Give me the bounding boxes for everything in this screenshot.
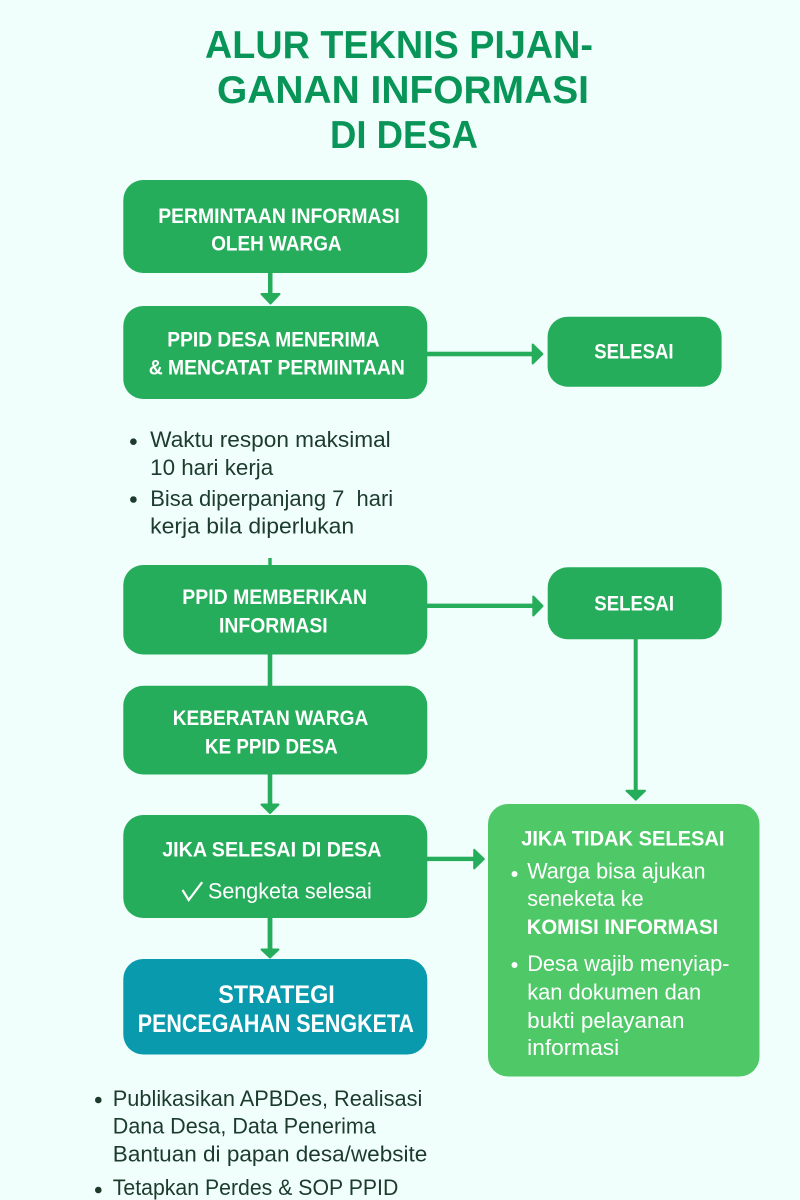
text: sengketa selesai: Sengketa selesai bbox=[208, 878, 372, 904]
box: permintaan informasi: OLEH WARGA bbox=[211, 232, 342, 256]
box: strategi pencegahan sengketa bbox=[123, 959, 427, 1054]
heading: jika tidak selesai: JIKA TIDAK SELESAI bbox=[521, 826, 724, 850]
box: selesai 2 bbox=[548, 567, 722, 639]
box: ppid memberikan informasi: INFORMASI bbox=[219, 614, 328, 638]
box: jika selesai di desa bbox=[123, 815, 427, 918]
box: ppid memberikan informasi bbox=[123, 565, 427, 654]
box: ppid memberikan informasi: PPID MEMBERIKAN bbox=[182, 585, 367, 609]
text block: dokumen: informasi bbox=[527, 1035, 619, 1060]
text block: strategi list: Dana Desa, Data Penerima bbox=[113, 1114, 377, 1138]
box: keberatan warga: KE PPID DESA bbox=[205, 734, 338, 758]
text block: strategi list: Bantuan di papan desa/website bbox=[113, 1142, 427, 1166]
box: ppid desa menerima: PPID DESA MENERIMA bbox=[167, 328, 380, 352]
arrow: ppid to selesai 1 bbox=[426, 344, 542, 364]
connector stub above ppid memberikan bbox=[268, 558, 272, 567]
text block: dokumen: kan dokumen dan bbox=[527, 980, 701, 1004]
box: ppid desa menerima: & MENCATAT PERMINTAAN bbox=[149, 356, 405, 380]
box: keberatan warga bbox=[123, 686, 427, 774]
text block: waktu respon bbox=[130, 427, 393, 538]
box: selesai 1 bbox=[548, 317, 722, 387]
text block: waktu respon: kerja bila diperlukan bbox=[150, 514, 354, 538]
title: GANAN INFORMASI bbox=[217, 69, 589, 112]
text block: dokumen: bukti pelayanan bbox=[527, 1008, 684, 1033]
text block: strategi list: Tetapkan Perdes & SOP PPID bbox=[113, 1175, 398, 1200]
box: permintaan informasi bbox=[123, 180, 427, 273]
arrow: keberatan to jika selesai bbox=[262, 773, 278, 813]
arrow: jika selesai to strategi bbox=[262, 917, 278, 958]
arrow: selesai 2 to jika tidak selesai bbox=[626, 638, 645, 800]
title: ALUR TEKNIS PIJAN- bbox=[205, 24, 593, 67]
text block: ajukan sengketa: Warga bisa ajukan bbox=[527, 858, 706, 884]
box: strategi pencegahan sengketa: PENCEGAHAN SENGKETA bbox=[138, 1010, 414, 1038]
text block: waktu respon: Bisa diperpanjang 7 hari bbox=[150, 486, 393, 511]
panel: jika tidak selesai bbox=[488, 804, 760, 1076]
arrow: jika selesai to jika tidak selesai bbox=[426, 850, 484, 868]
text block: dokumen: Desa wajib menyiap- bbox=[527, 951, 730, 976]
box: permintaan informasi: PERMINTAAN INFORMASI bbox=[158, 204, 400, 228]
title: DI DESA bbox=[330, 114, 478, 157]
connector: memberikan to keberatan bbox=[268, 653, 272, 687]
box: selesai 2: SELESAI bbox=[594, 592, 674, 616]
title bbox=[205, 24, 593, 157]
box: ppid desa menerima bbox=[123, 306, 427, 399]
box: strategi pencegahan sengketa: STRATEGI bbox=[218, 981, 335, 1009]
text block: dokumen bbox=[512, 951, 730, 1060]
text block: strategi list bbox=[95, 1086, 427, 1200]
text block: waktu respon: 10 hari kerja bbox=[150, 455, 274, 480]
text block: strategi list: Publikasikan APBDes, Realisasi bbox=[113, 1086, 422, 1111]
text block: ajukan sengketa bbox=[512, 858, 718, 939]
box: jika selesai di desa: JIKA SELESAI DI DESA bbox=[162, 837, 382, 861]
icon: check mark bbox=[182, 882, 202, 900]
text block: waktu respon: Waktu respon maksimal bbox=[150, 427, 391, 452]
arrow: permintaan to ppid bbox=[262, 272, 280, 304]
text block: ajukan sengketa: seneketa ke bbox=[527, 886, 644, 911]
text block: ajukan sengketa: KOMISI INFORMASI bbox=[527, 915, 718, 939]
arrow: memberikan to selesai 2 bbox=[426, 596, 542, 616]
box: selesai 1: SELESAI bbox=[594, 339, 674, 363]
box: keberatan warga: KEBERATAN WARGA bbox=[173, 706, 368, 730]
